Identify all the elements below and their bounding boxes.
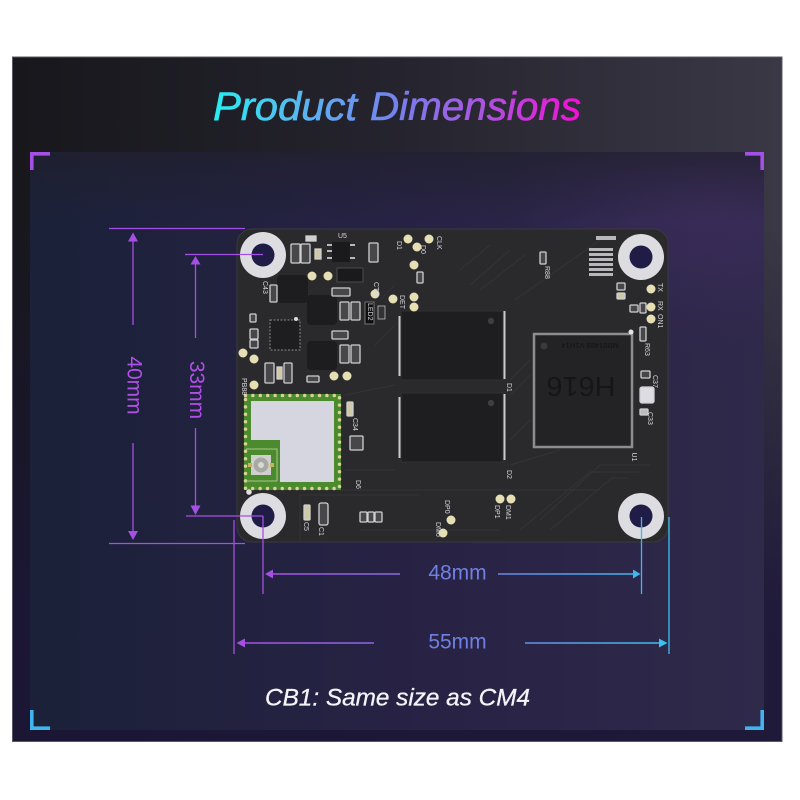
H616 processor chip [534, 330, 637, 462]
silkscreen labels: DP1 [493, 505, 500, 519]
silkscreen labels: D6 [354, 480, 361, 489]
circuit board [237, 229, 668, 542]
label: 48mm: 48mm [428, 562, 487, 584]
title: Product [213, 85, 359, 129]
board body [237, 229, 668, 542]
label: 40mm: 40mm [122, 356, 146, 415]
silkscreen labels: PB88 [240, 378, 247, 395]
silkscreen labels: C34 [351, 418, 358, 431]
silkscreen labels: D2 [505, 470, 512, 479]
resistor array [589, 236, 616, 276]
board traces [300, 240, 650, 540]
silkscreen labels: DET [398, 295, 405, 310]
silkscreen labels: R88 [543, 266, 550, 279]
label: 33mm: 33mm [185, 361, 208, 419]
dimension: 55mm width [234, 517, 669, 654]
corner brackets [32, 154, 762, 728]
H616 processor chip: H616 [546, 371, 616, 402]
wifi module [244, 394, 341, 495]
inductors and ICs [270, 242, 385, 370]
H616 processor chip: U1 [630, 453, 637, 462]
silkscreen labels: D0 [419, 245, 426, 254]
silkscreen labels: DP0 [443, 500, 450, 514]
silkscreen labels: C37 [651, 375, 658, 388]
H616 processor chip: MB01488 V1H14 [561, 341, 619, 350]
antenna connector [248, 455, 274, 475]
title: Dimensions [370, 85, 581, 129]
silkscreen labels: C43 [261, 281, 268, 294]
silkscreen labels [240, 233, 663, 537]
silkscreen labels: DM1 [504, 505, 511, 520]
silkscreen labels: R63 [643, 343, 650, 356]
silkscreen labels: CTP [372, 282, 379, 296]
silkscreen labels: U5 [338, 233, 347, 240]
silkscreen labels: CLK [435, 236, 442, 250]
mounting holes [240, 232, 664, 539]
gold test pads [238, 234, 656, 538]
silkscreen labels: ON1 [656, 314, 663, 328]
label: 55mm: 55mm [428, 630, 487, 654]
silkscreen labels: LED2 [366, 303, 373, 321]
silkscreen labels: RX [656, 301, 663, 311]
RAM chip 1 [398, 311, 506, 380]
caption: CB1: Same size as CM4 [265, 684, 530, 712]
RAM chip 2 [398, 393, 506, 462]
dimension: 33mm height [185, 254, 263, 516]
silkscreen labels: D1 [395, 241, 402, 250]
inner gradient panel [30, 152, 764, 730]
silkscreen labels: C1 [317, 527, 324, 536]
silkscreen labels: DM0 [434, 522, 441, 537]
silkscreen labels: C5 [302, 522, 309, 531]
dimension: 48mm width [263, 516, 642, 594]
silkscreen labels: TX [656, 283, 663, 292]
dimension: 40mm height [109, 228, 245, 544]
silkscreen labels: C33 [646, 412, 653, 425]
small capacitors [250, 236, 654, 525]
silkscreen labels: D1 [505, 383, 512, 392]
